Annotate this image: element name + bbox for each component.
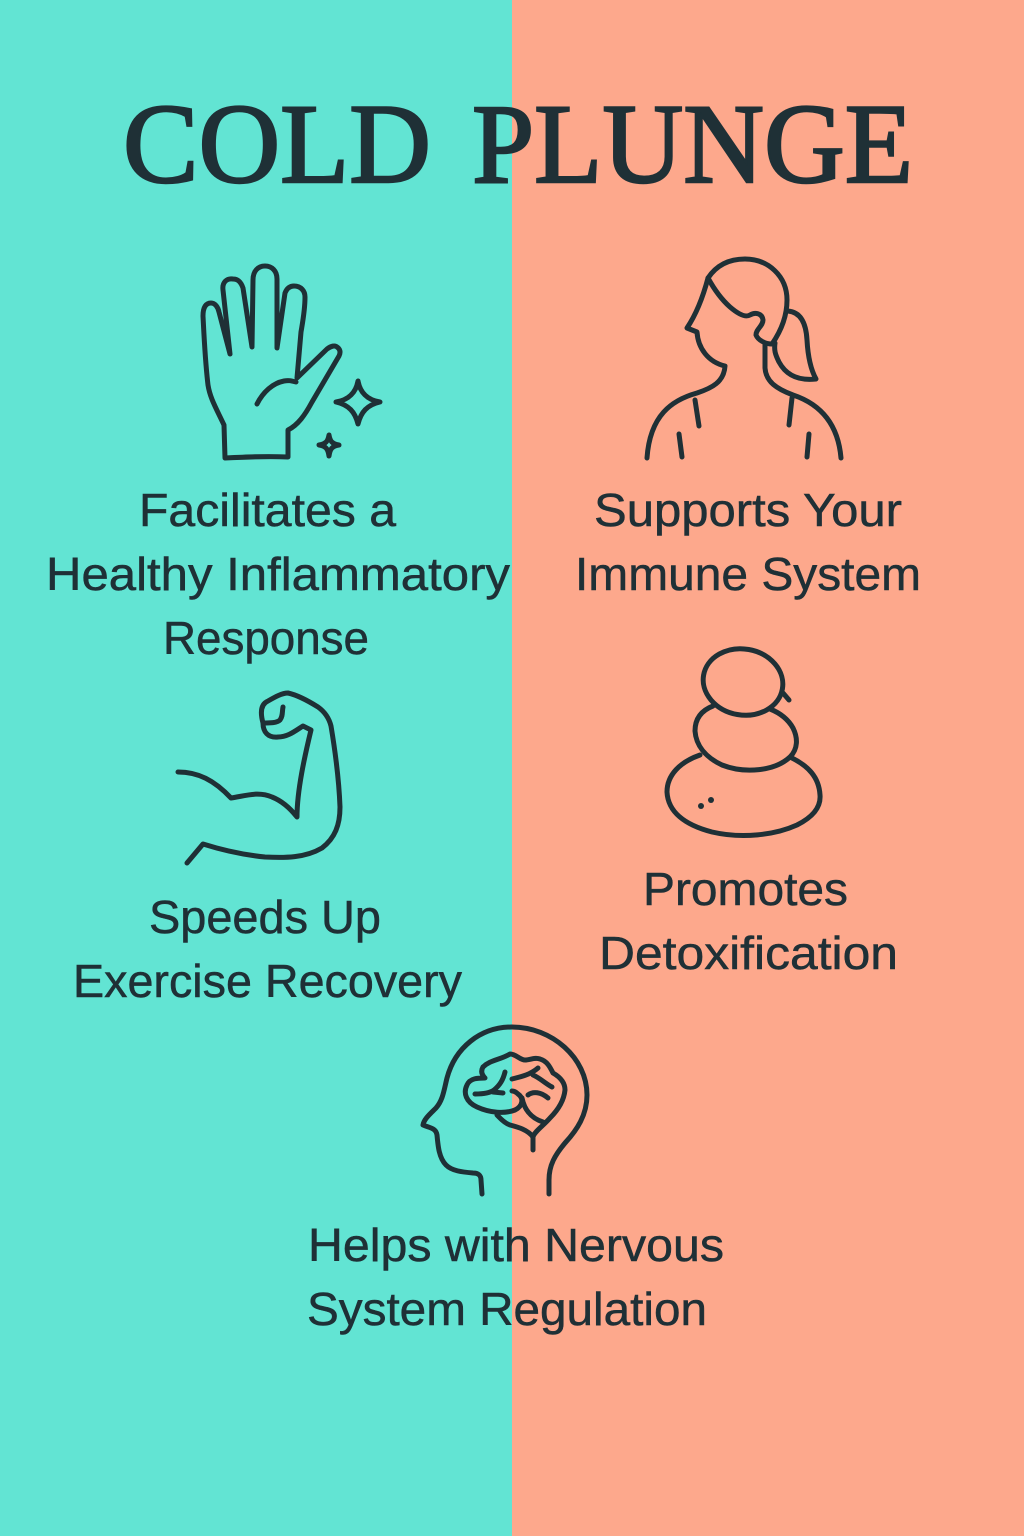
text: speeds up exercise recovery: Speeds Up	[149, 891, 381, 943]
icon: woman head and shoulders	[647, 259, 841, 458]
text: speeds up exercise recovery: Exercise Recovery	[73, 955, 462, 1007]
text: promotes detoxification: Detoxification	[599, 927, 898, 979]
text: facilitates a healthy inflammatory response: Facilitates a	[139, 484, 396, 536]
text: facilitates a healthy inflammatory response	[46, 484, 510, 664]
text: speeds up exercise recovery	[73, 891, 462, 1007]
panel: salmon right background	[512, 0, 1024, 1536]
title: PLUNGE	[472, 82, 913, 207]
icon: head with brain	[423, 1027, 587, 1194]
text: helps with nervous system regulation: Helps with Nervous	[308, 1219, 724, 1271]
panel: teal left background	[0, 0, 512, 1536]
icon: small sparkle	[319, 435, 339, 456]
text: facilitates a healthy inflammatory response: Response	[163, 612, 369, 664]
text: supports your immune system	[575, 484, 921, 600]
text: promotes detoxification	[599, 863, 898, 979]
text: facilitates a healthy inflammatory response: Healthy Inflammatory	[46, 548, 510, 600]
text: supports your immune system: Immune System	[575, 548, 921, 600]
text: supports your immune system: Supports Your	[594, 484, 902, 536]
brain outline	[483, 1054, 565, 1150]
title: COLD	[123, 82, 431, 207]
icon: stacked stones	[667, 643, 820, 836]
text: helps with nervous system regulation	[307, 1219, 724, 1335]
icon: large sparkle	[336, 381, 380, 424]
icon: hand with sparkles	[203, 266, 380, 458]
text: promotes detoxification: Promotes	[643, 863, 848, 915]
text: helps with nervous system regulation: System Regulation	[307, 1283, 707, 1335]
icon: flexed arm	[178, 693, 340, 863]
title	[123, 82, 913, 207]
